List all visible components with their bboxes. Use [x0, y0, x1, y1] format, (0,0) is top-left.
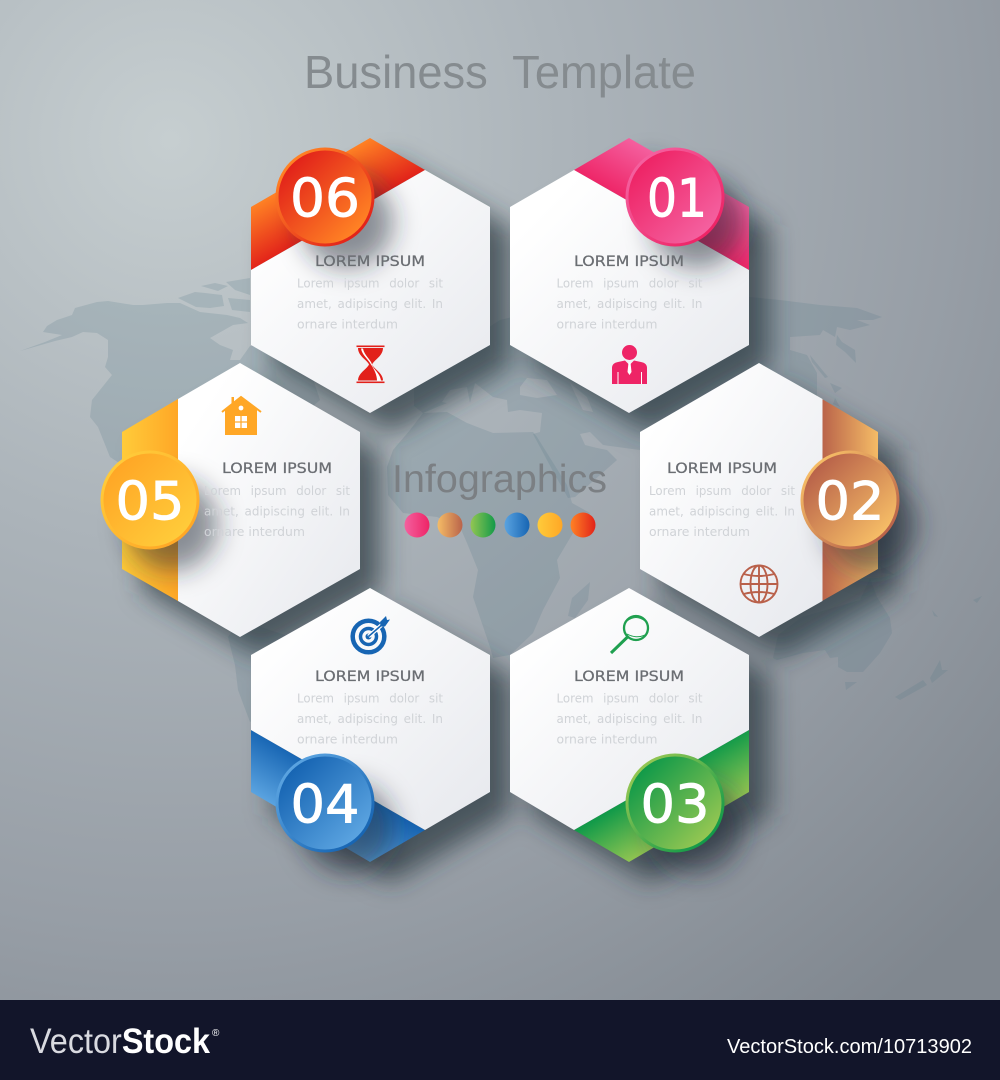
icon: globe — [740, 566, 778, 602]
ribbon 03 — [574, 730, 749, 862]
body text 04 — [297, 692, 443, 746]
title: Business Template — [304, 46, 696, 98]
panel: 01 — [510, 138, 749, 413]
badge 01: 01 — [647, 168, 707, 230]
body text 06: Lorem ipsum dolor sit — [297, 276, 443, 290]
hexagon 05 — [178, 363, 360, 637]
body text 02: ornare interdum — [649, 525, 750, 539]
badge shadow 04 — [301, 782, 393, 874]
footer bar — [0, 1000, 1000, 1080]
heading 02: LOREM IPSUM — [667, 461, 777, 477]
icon: target — [353, 616, 390, 652]
hexagon 06 — [251, 170, 490, 413]
badge shadow 06 — [301, 176, 393, 268]
body text 05: ornare interdum — [204, 525, 305, 539]
badge 06 — [276, 148, 374, 246]
ribbon 06 — [251, 138, 425, 270]
Australia — [773, 578, 892, 672]
body text 02: amet, adipiscing elit. In — [649, 504, 795, 518]
badge shadow 05 — [126, 479, 218, 571]
heading 05: LOREM IPSUM — [222, 461, 332, 477]
icon: hourglass — [356, 346, 384, 383]
ribbon 01 — [574, 138, 749, 270]
badge 03: 03 — [640, 774, 710, 836]
heading 04: LOREM IPSUM — [315, 669, 425, 685]
body text 05: Lorem ipsum dolor sit — [204, 484, 350, 498]
body text 04: Lorem ipsum dolor sit — [297, 692, 443, 706]
image id: VectorStock.com/10713902 — [727, 1036, 972, 1058]
panel: 06 — [251, 138, 490, 413]
icon: house — [222, 397, 261, 435]
panel: 05 — [100, 363, 360, 637]
hexagon 04 — [251, 588, 490, 830]
body text 03: ornare interdum — [556, 732, 658, 746]
badge 04 — [276, 754, 374, 852]
body text 02: Lorem ipsum dolor sit — [649, 484, 795, 498]
colour dots — [404, 512, 596, 538]
badge shadow 03 — [651, 782, 743, 874]
Kamchatka and Japan — [810, 335, 856, 407]
body text 03 — [556, 692, 703, 746]
body text 06: ornare interdum — [297, 318, 398, 332]
Eurasia — [414, 285, 882, 498]
icon: person — [612, 345, 647, 384]
badge 01 — [626, 148, 724, 246]
body text 04: ornare interdum — [297, 732, 398, 746]
body text 02 — [649, 484, 795, 539]
body text 05: amet, adipiscing elit. In — [204, 504, 350, 518]
ribbon 05 — [122, 399, 178, 601]
body text 06 — [297, 276, 443, 332]
badge 05: 05 — [116, 472, 184, 532]
Africa — [387, 412, 590, 658]
ribbon 04 — [251, 730, 425, 862]
heading 06: LOREM IPSUM — [315, 254, 425, 270]
panel shadows — [143, 159, 899, 883]
heading 03: LOREM IPSUM — [574, 669, 684, 685]
registered mark: ® — [212, 1028, 220, 1039]
Arctic islands — [178, 278, 250, 312]
body text 01: ornare interdum — [556, 318, 658, 332]
body text 01: amet, adipiscing elit. In — [556, 297, 702, 311]
Madagascar — [568, 582, 590, 618]
body text 06: amet, adipiscing elit. In — [297, 297, 443, 311]
panel: 04 — [251, 588, 490, 874]
body text 04: amet, adipiscing elit. In — [297, 712, 443, 726]
badge shadow 01 — [651, 176, 743, 268]
body text 03: amet, adipiscing elit. In — [556, 712, 702, 726]
body text 05 — [204, 484, 350, 539]
badge 06: 06 — [290, 168, 360, 230]
body text 01 — [556, 276, 703, 332]
VectorStock logo: VectorStock — [30, 1022, 210, 1061]
world map — [20, 278, 982, 722]
panel: 03 — [510, 588, 749, 874]
Tasmania, New Zealand and Pacific islands — [845, 565, 982, 700]
panel: 02 — [640, 363, 918, 637]
South America — [228, 620, 300, 722]
infographics label: Infographics — [392, 458, 607, 501]
hexagon 02 — [640, 363, 822, 637]
ribbon 02 — [822, 399, 878, 601]
badge 04: 04 — [290, 774, 360, 836]
heading 01: LOREM IPSUM — [574, 254, 684, 270]
badge 02: 02 — [816, 472, 884, 532]
body text 01: Lorem ipsum dolor sit — [556, 276, 703, 290]
badge 02 — [800, 450, 900, 550]
badge 03 — [626, 754, 724, 852]
body text 03: Lorem ipsum dolor sit — [556, 692, 703, 706]
hexagon 03 — [510, 588, 749, 830]
badge shadow 02 — [826, 479, 918, 571]
hexagon 01 — [510, 170, 749, 413]
badge 05 — [100, 450, 200, 550]
North America — [20, 301, 320, 470]
icon: magnifier — [611, 616, 648, 653]
